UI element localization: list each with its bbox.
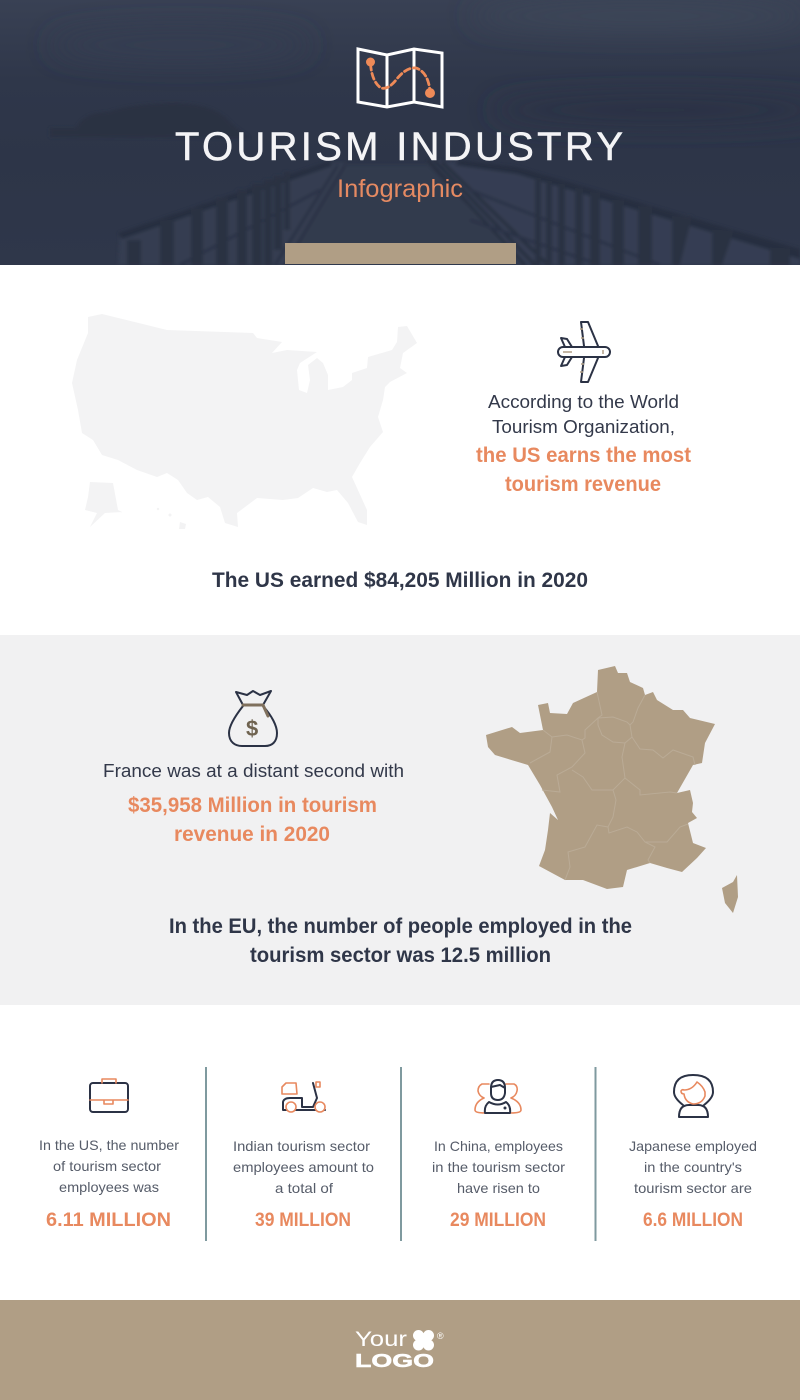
stat: China: In China, employees (434, 1138, 563, 1154)
icon: folded map with route (358, 49, 442, 107)
stat: India: employees amount to (233, 1159, 374, 1175)
heading: EU employment: tourism sector was 12.5 million (250, 944, 551, 967)
stat: China: have risen to (457, 1180, 540, 1196)
text: France revenue: revenue in 2020 (174, 823, 330, 846)
stat: Japan: tourism sector are (634, 1180, 752, 1196)
stat: United States: of tourism sector (53, 1158, 161, 1174)
map: France (486, 666, 738, 913)
icon: money bag (229, 691, 277, 746)
panel: header banner (0, 0, 800, 265)
panel: US revenue (0, 265, 800, 635)
stat: United States (39, 1079, 179, 1231)
stat: India: 39 MILLION (255, 1210, 351, 1231)
stat: Japan: in the country's (644, 1159, 742, 1175)
logo (355, 1328, 444, 1371)
tan tab (285, 243, 516, 264)
stat: China (432, 1080, 565, 1231)
stat: United States: In the US, the number (39, 1137, 179, 1153)
icon: airplane (558, 322, 610, 382)
stat: Japan: Japanese employed (629, 1138, 757, 1154)
stat: United States: 6.11 MILLION (46, 1210, 171, 1231)
icon: money bag: $ (246, 716, 258, 741)
text: France revenue (103, 761, 404, 846)
panel: footer (0, 1300, 800, 1400)
text: France revenue: France was at a distant second with (103, 761, 404, 781)
text: World Tourism Organization: Tourism Organization, (492, 417, 675, 437)
stat: India (233, 1082, 374, 1231)
heading: EU employment: In the EU, the number of people employed in the (169, 915, 632, 938)
panel: employment statistics (39, 1067, 757, 1241)
icon: group of employees (475, 1080, 521, 1113)
logo: ® (437, 1331, 444, 1341)
stat: United States: employees was (59, 1179, 159, 1195)
title: TOURISM INDUSTRY (175, 125, 623, 169)
heading: EU employment (169, 915, 632, 967)
text: World Tourism Organization (476, 392, 691, 496)
stat: India: Indian tourism sector (233, 1138, 370, 1154)
heading: US earnings: The US earned $84,205 Million in 2020 (212, 569, 588, 592)
subtitle: Infographic (337, 175, 463, 203)
stat: Japan (629, 1075, 757, 1231)
text: World Tourism Organization: tourism revenue (505, 473, 661, 496)
icon: woman with hair (674, 1075, 713, 1117)
map: United States (72, 314, 417, 529)
text: World Tourism Organization: According to the World (488, 392, 679, 412)
text: World Tourism Organization: the US earns the most (476, 444, 691, 467)
icon: scooter (282, 1082, 325, 1112)
logo: LOGO (355, 1351, 434, 1371)
icon: briefcase (90, 1079, 128, 1112)
text: France revenue: $35,958 Million in tourism (128, 794, 377, 817)
panel: France revenue (0, 635, 800, 1005)
stat: India: a total of (275, 1180, 333, 1196)
stat: China: in the tourism sector (432, 1159, 565, 1175)
stat: Japan: 6.6 MILLION (643, 1210, 743, 1231)
logo: Your (355, 1328, 407, 1351)
stat: China: 29 MILLION (450, 1210, 546, 1231)
